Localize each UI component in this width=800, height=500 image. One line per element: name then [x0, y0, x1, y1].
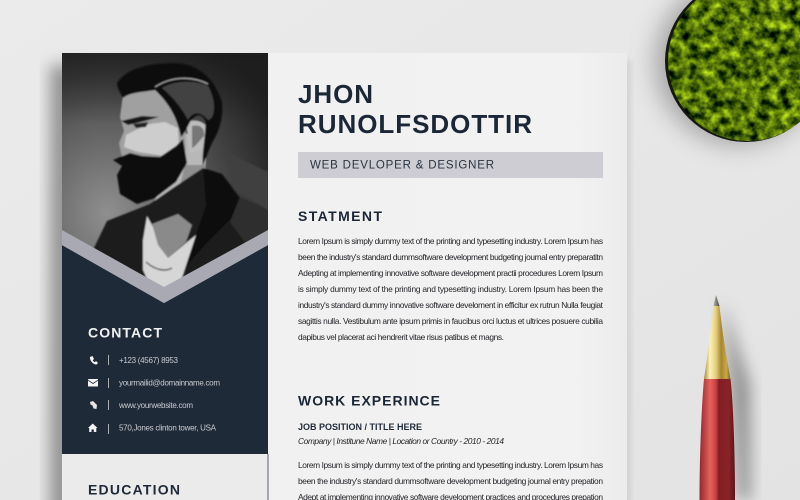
pen [700, 295, 735, 500]
sidebar [62, 53, 268, 500]
potted plant [665, 0, 800, 142]
page shadow [50, 60, 631, 500]
statement body text: Lorem Ipsum is simply dummy text of the printing and typesetting industry. Lorem Ipsum has [298, 236, 603, 246]
beard [113, 139, 187, 204]
resume page [62, 53, 627, 500]
contact heading: CONTACT [88, 324, 162, 340]
contact row: address: 570,Jones clinton tower, USA [119, 424, 217, 432]
work experience heading: WORK EXPERINCE [298, 392, 440, 408]
neck [154, 132, 207, 202]
statement body text: is simply dummy text of the printing and typesetting industry. Lorem Ipsum has been the [298, 284, 603, 294]
work experience section [298, 392, 603, 500]
eyebrow and eye [121, 116, 159, 125]
statement heading: STATMENT [298, 208, 382, 224]
contact row: phone: +123 (4567) 8953 [119, 356, 179, 365]
job description: been the industry's standard dummsoftware development budgeting journal entry prepation [298, 476, 603, 486]
shirt [143, 216, 196, 290]
icon: envelope [88, 379, 98, 386]
icon: house [88, 424, 98, 432]
statement body text: Adepting at implementing innovative software development practii procedures Lorem Ipsum [298, 268, 603, 278]
statement body text [298, 236, 604, 342]
job title: JOB POSITION / TITLE HERE [298, 422, 422, 432]
foliage [668, 0, 800, 141]
pen red barrel [700, 379, 735, 500]
job title bar: WEB DEVLOPER & DESIGNER [310, 160, 494, 172]
jacket [93, 168, 250, 276]
plant shadow [656, 0, 800, 144]
pen shadow [722, 300, 750, 500]
icon: cursor [90, 401, 97, 409]
company line: Company | Institune Name | Location or Country - 2010 - 2014 [298, 436, 504, 446]
statement body text: dapibus vel placerat aci hendrerit vitae risus patibus et magns. [298, 332, 504, 342]
education heading: EDUCATION [88, 482, 180, 498]
statement body text: industry's standard dummy innovative software develoment in efficitur ex rutrun Nulla feugiat [298, 300, 604, 310]
icon: phone [90, 356, 98, 364]
contact row: email [88, 378, 220, 388]
statement section [298, 208, 604, 342]
hair [117, 63, 222, 166]
face [118, 88, 186, 158]
chevron band [62, 230, 268, 303]
job description [298, 460, 603, 500]
name heading: RUNOLFSDOTTIR [298, 109, 532, 139]
statement body text: sagittis nulla. Vestibulum ante ipsum primis in faucibus orci luctus et ultrices posuere cubilia [298, 316, 603, 326]
job description: Lorem Ipsum is simply dummy text of the printing and typesetting industry. Lorem Ipsum has [298, 460, 603, 470]
portrait photo [62, 53, 268, 290]
statement body text: been the industry's standard dummsoftware development budgeting journal entry preparatitn [298, 252, 603, 262]
job title bar [298, 152, 603, 178]
contact row: address [88, 424, 217, 434]
dark contact panel [62, 245, 268, 454]
pen nib [714, 295, 720, 306]
contact row: website: www.yourwebsite.com [118, 401, 193, 410]
contact row: email: yourmailid@domainname.com [119, 378, 220, 388]
name heading [298, 79, 532, 139]
pen gold collar [704, 306, 730, 379]
ear [186, 119, 207, 140]
name heading: JHON [298, 79, 373, 109]
education panel [62, 454, 268, 500]
contact row: website [90, 400, 193, 410]
pot rim [665, 0, 800, 142]
contact row: phone [90, 355, 179, 365]
